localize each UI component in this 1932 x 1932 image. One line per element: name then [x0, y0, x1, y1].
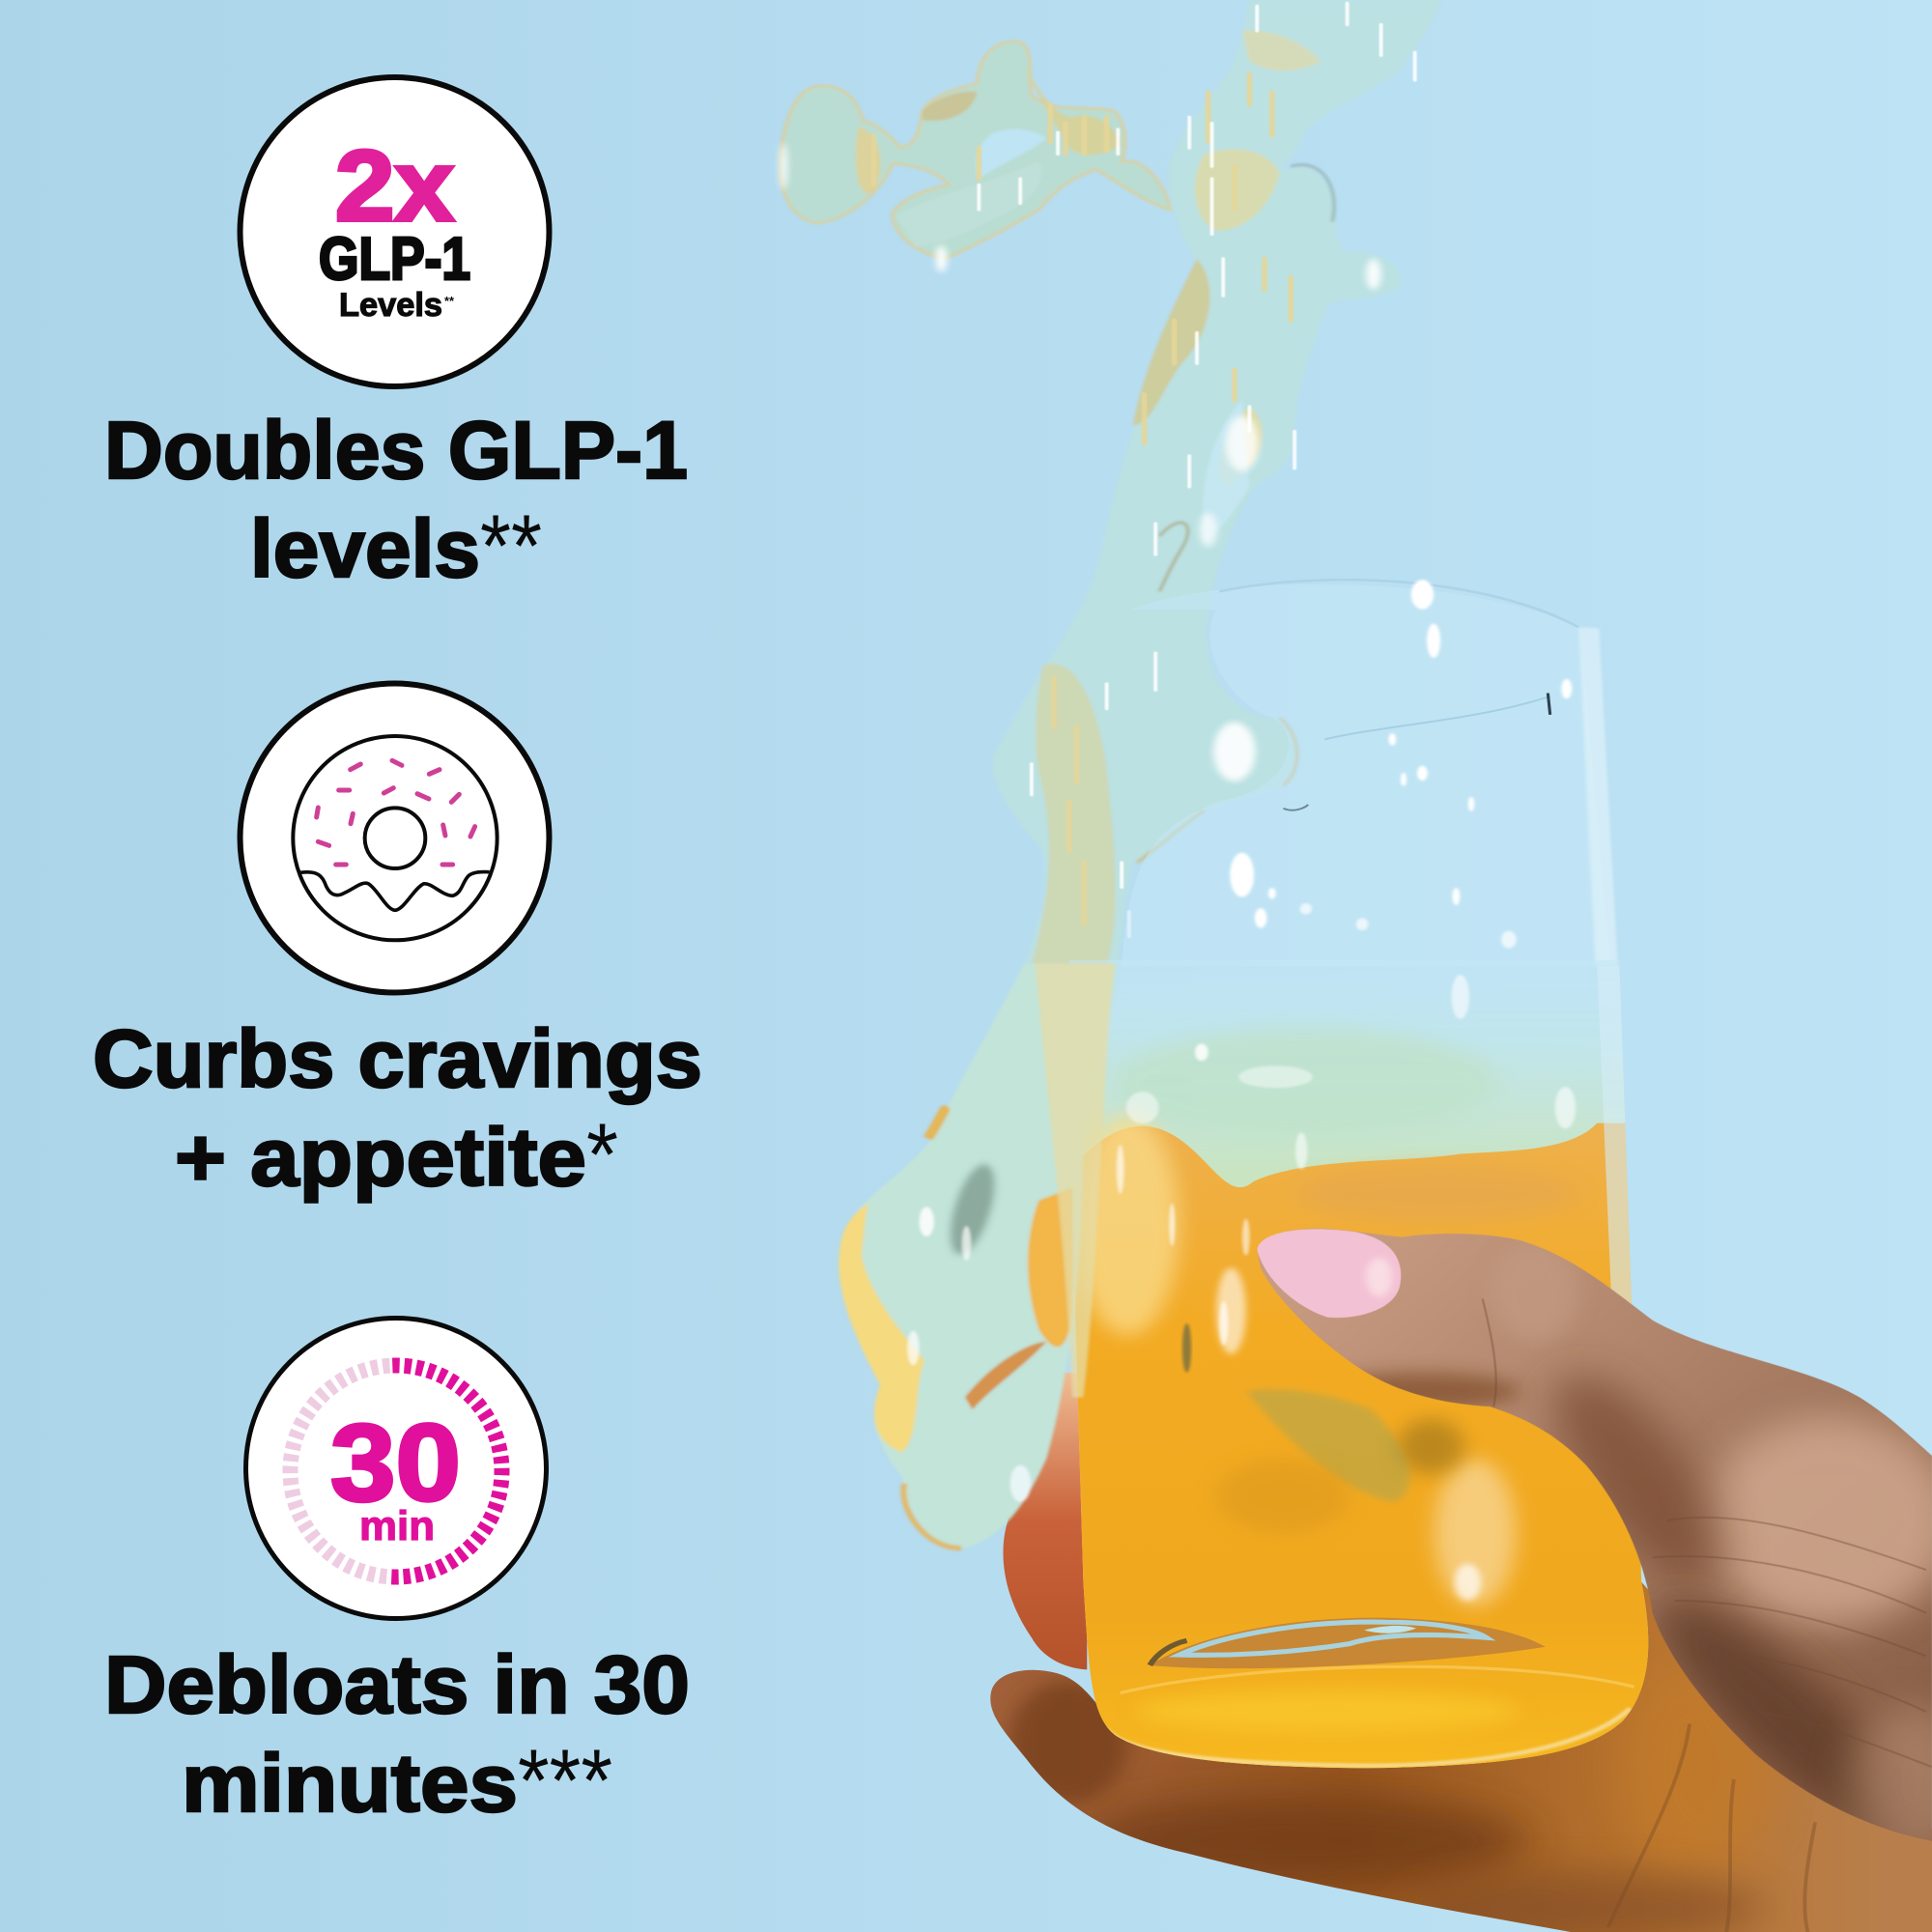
glass droplets and highlights	[1230, 580, 1572, 949]
feature 2	[93, 684, 702, 1205]
heading: levels: **	[480, 497, 542, 596]
heading: levels: levels	[250, 503, 480, 594]
splash: left water mass	[838, 963, 1118, 1548]
heading: minutes: minutes	[182, 1738, 518, 1829]
heading: minutes: ***	[518, 1732, 612, 1831]
photo: glass, orange drink and hand	[838, 960, 1932, 1932]
splash: bright highlights	[780, 143, 1381, 781]
badge: 30 min timer: 30	[330, 1402, 461, 1523]
badge: 2x GLP-1 levels	[240, 77, 549, 386]
badge: 2x GLP-1 levels: GLP-1	[319, 226, 470, 293]
heading: appetite: + appetite	[175, 1112, 586, 1203]
splash: left droplet branch	[781, 42, 1171, 259]
water streaks on glass	[1117, 975, 1576, 1346]
badge: 30 min timer	[245, 1318, 547, 1619]
badge: 2x GLP-1 levels: Levels	[339, 287, 442, 324]
hand: lower palm	[990, 1582, 1932, 1932]
splash: main stream	[992, 0, 1441, 966]
heading: curbs cravings: Curbs cravings	[93, 1013, 702, 1104]
feature 1	[104, 77, 688, 596]
heading: minutes	[182, 1732, 612, 1831]
badge: 30 min timer: min	[359, 1503, 435, 1549]
badge: 2x GLP-1 levels: 2x	[335, 130, 454, 242]
glass body with liquid	[1068, 960, 1660, 1779]
heading: debloats in 30: Debloats in 30	[104, 1639, 690, 1730]
badge: donut icon	[240, 684, 549, 993]
heading: appetite: *	[586, 1106, 618, 1205]
thumb nail: pink polish	[1257, 1229, 1401, 1318]
splash: glints and golden streaks	[873, 3, 1415, 936]
feature 3	[104, 1318, 690, 1831]
hand: thumb and back of hand	[1257, 1229, 1932, 1861]
orange liquid	[1068, 1123, 1660, 1779]
heading: doubles GLP-1: Doubles GLP-1	[104, 405, 688, 496]
glass base refraction	[1150, 1618, 1546, 1668]
photo: water splash above glass	[780, 0, 1618, 966]
badge: 2x GLP-1 levels: **	[444, 294, 455, 308]
hand: fingers behind glass	[997, 1373, 1087, 1669]
skin creases	[1483, 1298, 1932, 1767]
glass rim and upper body	[1122, 580, 1618, 966]
